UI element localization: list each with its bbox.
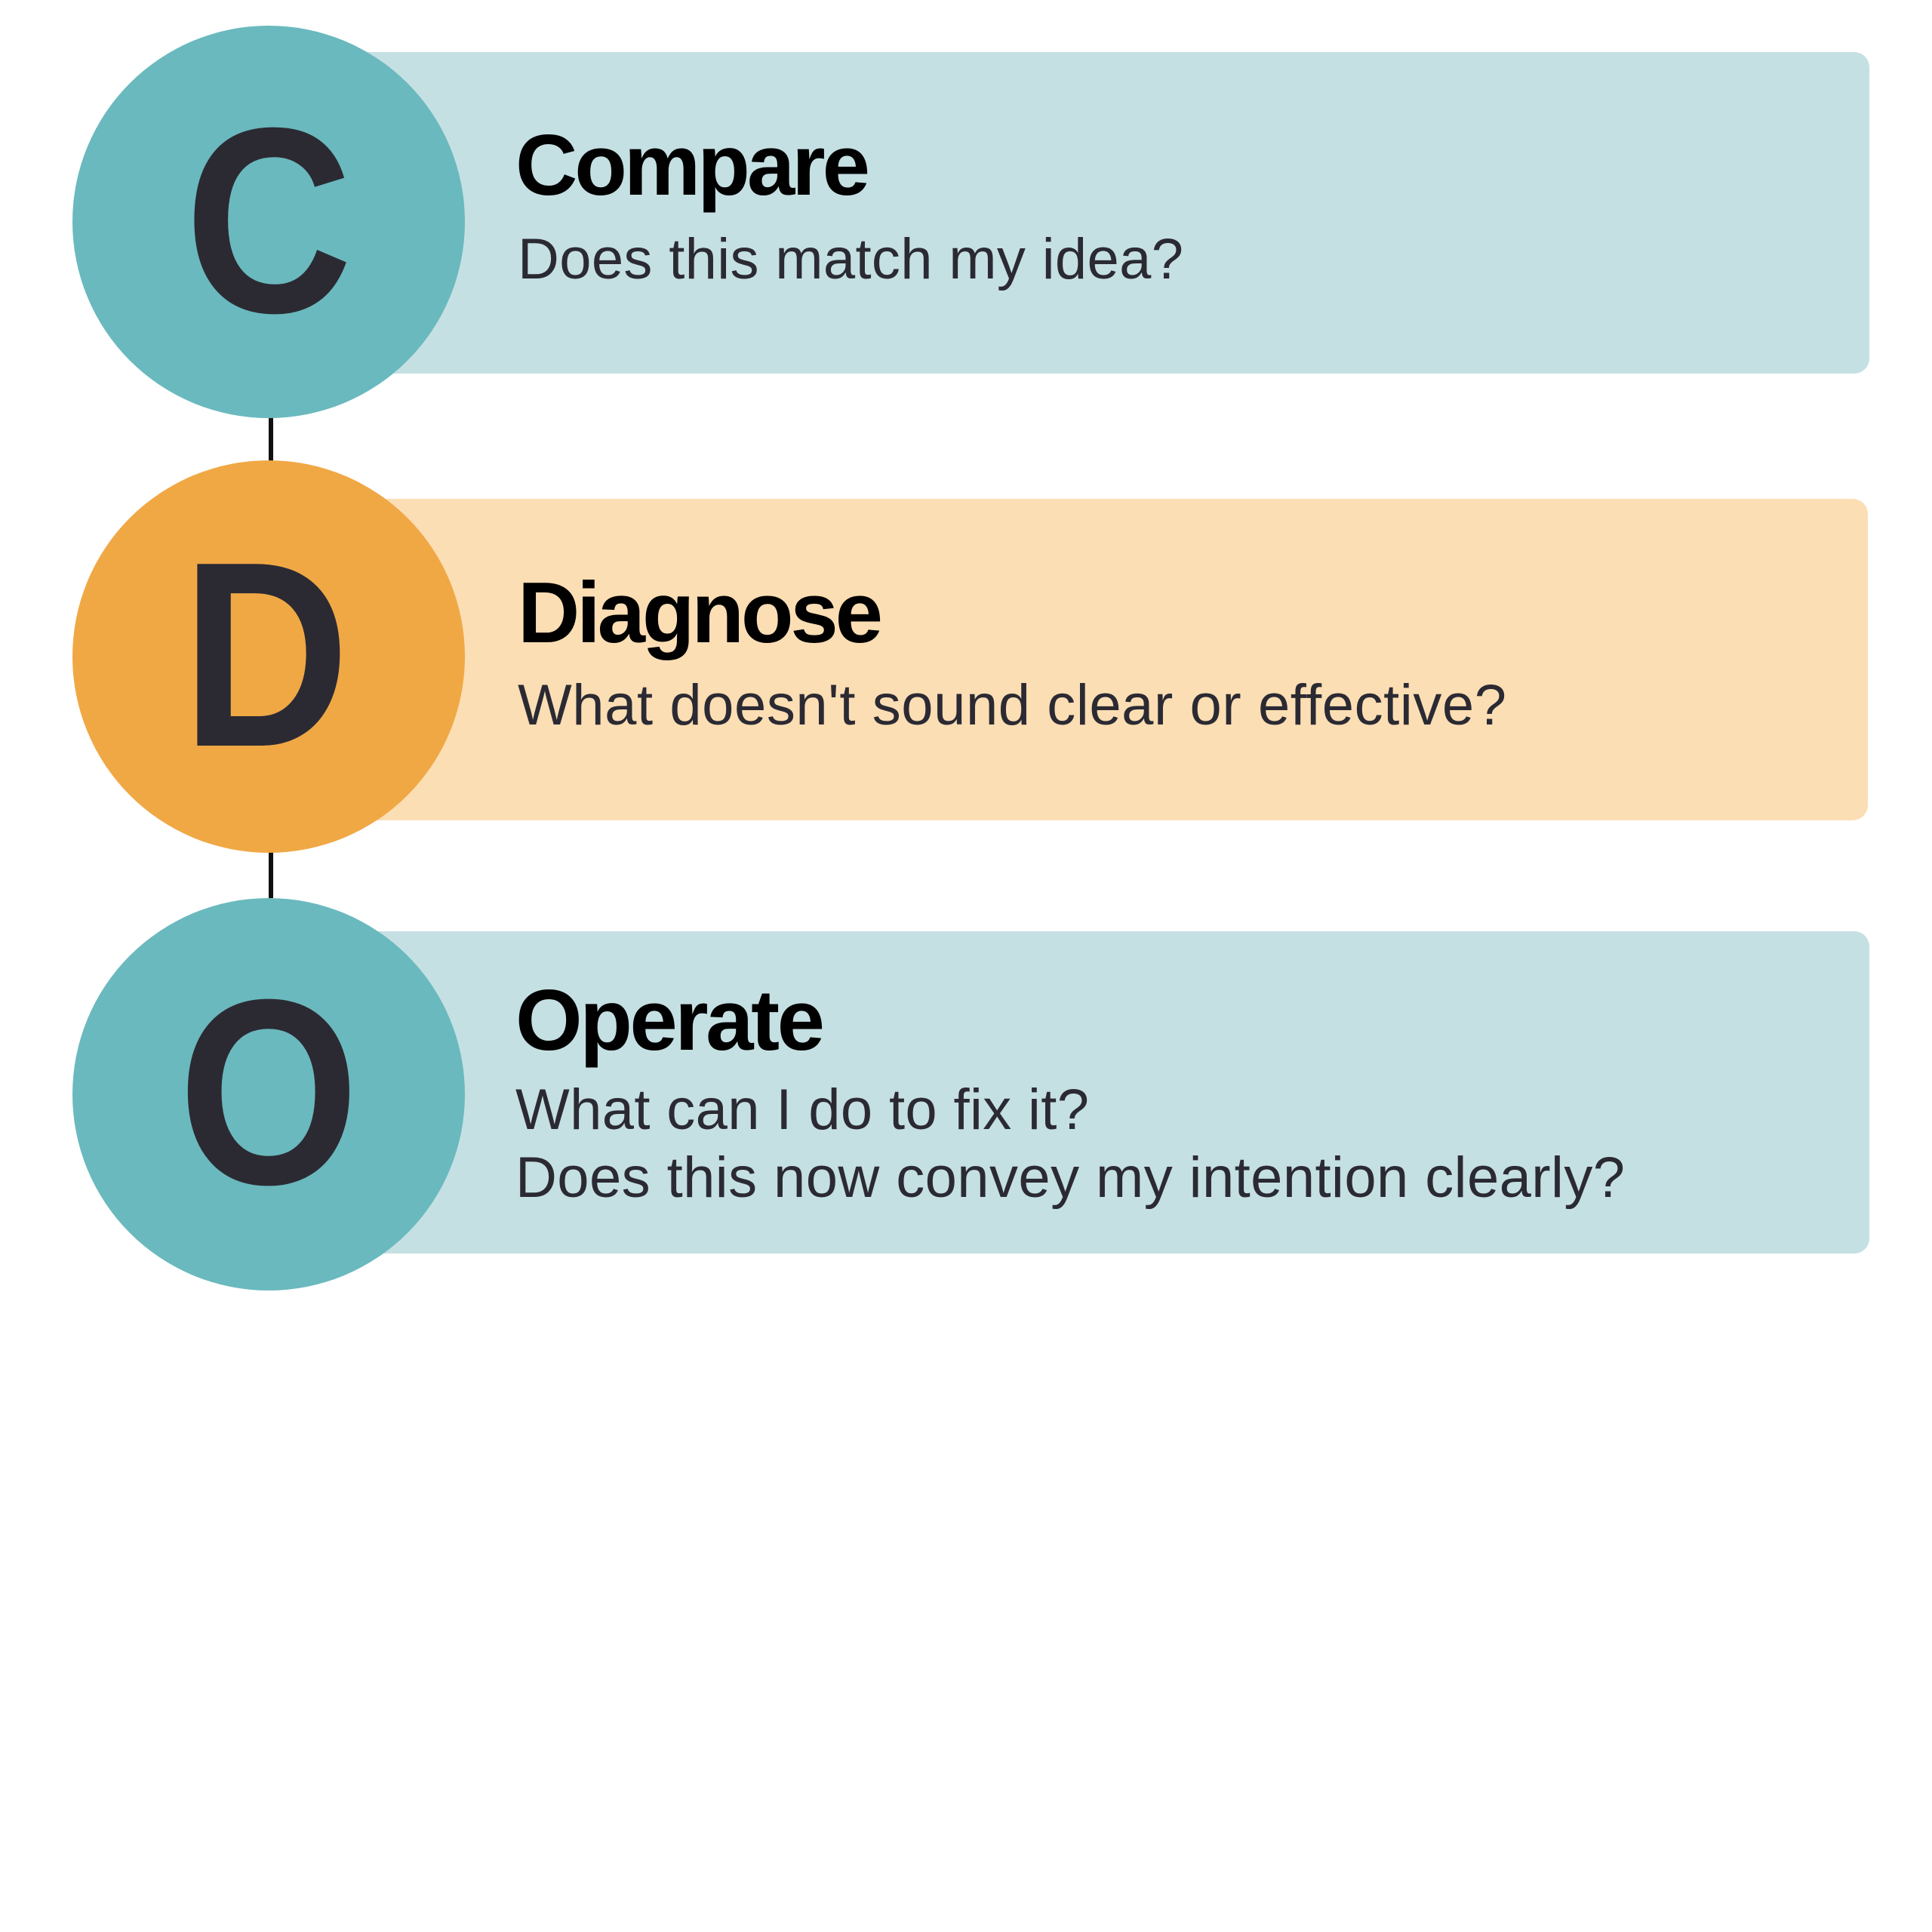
icon: circle O xyxy=(72,898,465,1291)
heading: Compare: Compare xyxy=(515,118,870,214)
text: operate questions xyxy=(515,1078,1625,1210)
text: operate questions: What can I do to fix it? xyxy=(515,1078,1089,1142)
panel: diagnose xyxy=(269,499,1868,820)
icon: circle O: O xyxy=(178,945,359,1239)
heading: Diagnose: Diagnose xyxy=(518,565,883,661)
text: operate questions: Does this now convey my intention clearly? xyxy=(515,1146,1625,1210)
text: diagnose question: What doesn't sound clear or effective? xyxy=(518,673,1506,737)
panel: compare xyxy=(269,52,1869,374)
icon: circle C xyxy=(72,26,465,418)
icon: circle D: D xyxy=(182,507,349,801)
connector: C to D xyxy=(269,415,273,463)
heading: Operate: Operate xyxy=(515,973,825,1069)
icon: circle D xyxy=(72,460,465,853)
icon: circle C: C xyxy=(185,73,352,368)
text: compare question: Does this match my idea? xyxy=(518,227,1183,291)
connector: D to O xyxy=(269,850,273,898)
panel: operate xyxy=(269,931,1869,1254)
